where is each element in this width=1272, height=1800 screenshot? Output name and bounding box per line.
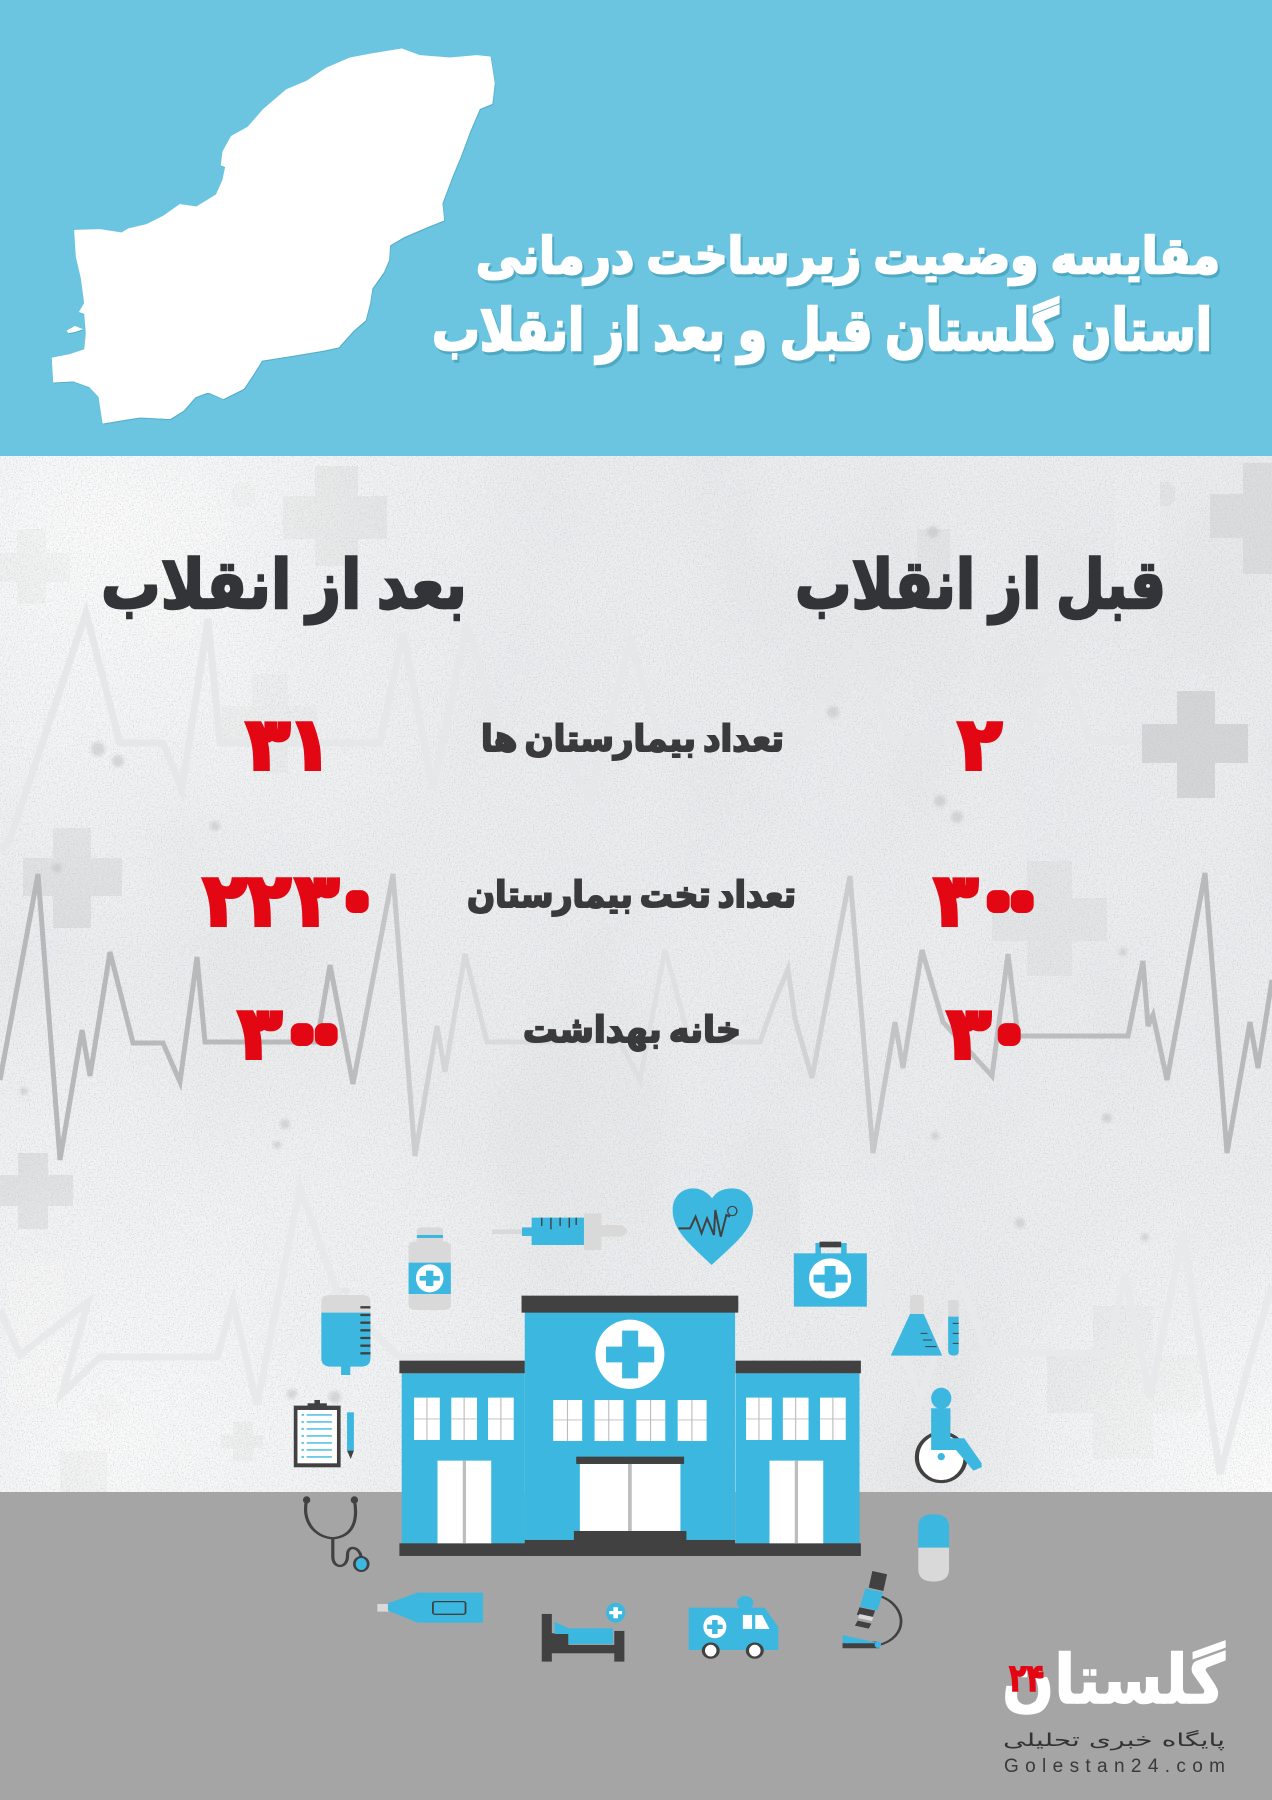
column heading: before revolution: قبل از انقلاب [795, 546, 1166, 625]
row: hospital beds: ۲۲۳ [203, 858, 339, 942]
header band [0, 0, 1272, 456]
row: hospital beds [203, 858, 1034, 942]
column heading: after revolution: بعد از انقلاب [101, 546, 467, 625]
row: health houses: خانه بهداشت [523, 1010, 741, 1051]
logo: پایگاه خبری تحلیلی [1003, 1729, 1225, 1751]
icon: thermometer [377, 1593, 483, 1623]
row: hospital beds: ۰۰ [986, 877, 1034, 923]
icon: medicine bottle [409, 1227, 451, 1310]
icon: flask and test tube [891, 1295, 959, 1356]
row: health houses: ۰ [997, 1010, 1021, 1056]
icon: microscope [843, 1571, 901, 1648]
icon: IV bag [321, 1287, 370, 1375]
row: health houses: ۳ [238, 991, 282, 1075]
row: hospital beds: ۳ [934, 858, 978, 942]
row: hospitals: ۳۱ [246, 702, 332, 786]
icon: hospital bed [542, 1603, 625, 1662]
title: مقایسه وضعیت زیرساخت درمانی [476, 227, 1220, 286]
row: hospital beds: ۰ [345, 877, 369, 923]
logo: گلستان [1002, 1641, 1225, 1720]
row: health houses: ۰۰ [290, 1010, 338, 1056]
row: hospitals: تعداد بیمارستان ها [481, 719, 784, 760]
medical illustration [294, 1188, 982, 1662]
row: hospitals [246, 702, 1002, 786]
logo: Golestan24.com [1004, 1756, 1225, 1777]
floor [0, 1492, 1272, 1800]
icon: first aid kit [794, 1242, 867, 1307]
faint upper heartbeat line [0, 613, 1140, 850]
icon: ambulance [689, 1596, 778, 1658]
icon: syringe [492, 1213, 627, 1250]
map of Golestan province [53, 49, 494, 423]
logo [1002, 1641, 1225, 1777]
icon: stethoscope [303, 1496, 368, 1571]
row: health houses [238, 991, 1021, 1075]
icon: clipboard and pencil [294, 1400, 354, 1467]
row: health houses: ۳ [947, 991, 991, 1075]
hospital building [399, 1296, 861, 1556]
title [432, 227, 1220, 365]
logo: ۲۴ [1009, 1656, 1044, 1700]
icon: heart with pulse [673, 1188, 753, 1265]
textured background [0, 456, 1272, 1492]
faint lower heartbeat line [0, 1187, 1272, 1474]
icon: capsule [918, 1514, 949, 1582]
icon: wheelchair [917, 1388, 982, 1482]
row: hospital beds: تعداد تخت بیمارستان [467, 875, 796, 916]
heartbeat line [0, 873, 1272, 1160]
row: hospitals: ۲ [958, 702, 1002, 786]
